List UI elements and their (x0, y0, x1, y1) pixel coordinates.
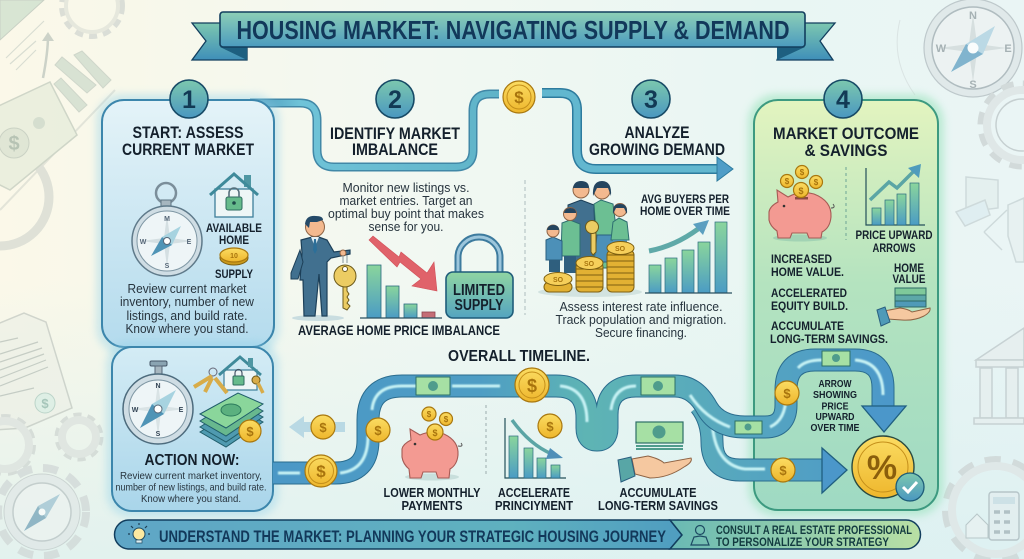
decoration: gear with calculator (946, 460, 1024, 559)
overall timeline heading: OVERALL TIMELINE. (448, 348, 590, 365)
bar chart: falling price (360, 265, 442, 318)
icon: piggy bank with coins: $ (814, 178, 819, 187)
right segment (670, 520, 920, 549)
coin: $ (527, 376, 537, 396)
label: ACCUMULATE (620, 485, 697, 500)
step 3 heading: GROWING DEMAND (589, 140, 725, 159)
connector pipe: step 1 to step 2 (250, 94, 499, 167)
timeline coins and notes (305, 351, 850, 487)
step 2 description (328, 181, 484, 234)
panel 4: market outcome and savings (748, 80, 944, 516)
banknote (641, 377, 675, 395)
left segment (115, 520, 682, 549)
ribbon body (220, 12, 805, 47)
icon: consultant (691, 526, 709, 545)
panel 4 background (754, 100, 938, 510)
arrow caption: SHOWING (813, 389, 857, 401)
decoration: compass top right: S (969, 79, 977, 91)
consult text: CONSULT A REAL ESTATE PROFESSIONAL (716, 525, 912, 537)
decoration: bank (974, 328, 1024, 424)
icon: compass (123, 361, 193, 444)
icon: family with coins: SO (553, 277, 564, 284)
lower branch arrow (700, 405, 847, 493)
coin (771, 458, 795, 482)
decoration: clock (0, 148, 49, 246)
action panel background (112, 347, 273, 511)
coin: $ (779, 463, 787, 478)
label: PRINCIYMENT (495, 498, 573, 513)
home value label: HOME (894, 263, 924, 275)
benefits list: LONG-TERM SAVINGS. (770, 332, 888, 346)
panel 1 heading: CURRENT MARKET (122, 140, 255, 159)
benefits list: INCREASED (771, 252, 832, 266)
icon: compass: E (187, 239, 192, 246)
icon: compass (132, 183, 202, 276)
step 3 description: Track population and migration. (556, 313, 726, 327)
icon: light bulb (128, 523, 150, 543)
icon: piggy bank: $ (427, 410, 432, 419)
number badge 3 (632, 80, 670, 118)
main pipe (273, 360, 883, 473)
available home label: HOME (219, 235, 249, 247)
action description: number of new listings, and build rate. (116, 482, 266, 494)
icon: percent coin with check: % (867, 449, 897, 487)
benefits list: EQUITY BUILD. (771, 299, 848, 313)
step 3 description (556, 300, 726, 340)
panel 1 description: Know where you stand. (126, 322, 248, 336)
icon: compass: M (164, 216, 170, 223)
action heading: ACTION NOW: (144, 452, 240, 469)
decoration: compass top right (897, 0, 1022, 97)
benefit: accelerate principal (495, 414, 573, 513)
small boy (546, 237, 562, 260)
step 2 description: market entries. Target an (340, 194, 473, 208)
benefits list: HOME VALUE. (771, 265, 844, 279)
connector arrow: step 2 to step 3 (542, 93, 733, 181)
icon: piggy bank with coins: $ (800, 168, 805, 177)
step 3 description: Secure financing. (595, 326, 687, 340)
banknote (416, 377, 450, 395)
divider (845, 167, 847, 240)
step 3 heading (589, 123, 725, 159)
number badge 1 (170, 80, 208, 118)
step 3: analyze growing demand (538, 80, 732, 340)
decoration: document (0, 313, 72, 430)
step 2 heading (330, 124, 461, 159)
icon: piggy bank with coins: $ (785, 177, 790, 186)
chart label (640, 194, 730, 218)
step 3 description: Assess interest rate influence. (560, 300, 722, 314)
label: LONG-TERM SAVINGS (598, 498, 718, 513)
number badge 2 (376, 80, 414, 118)
chart label: AVG BUYERS PER (641, 194, 730, 206)
coin: $ (783, 386, 791, 401)
home value label (892, 263, 926, 286)
action now panel (106, 341, 279, 517)
step 2 heading: IMBALANCE (352, 140, 438, 159)
action description: Review current market inventory, (120, 470, 262, 482)
chart label: HOME OVER TIME (640, 206, 730, 218)
decoration: money note: $ (8, 133, 20, 155)
ribbon tails (192, 23, 835, 60)
icon: limited supply padlock (446, 237, 513, 318)
panel 1 description: inventory, number of new (120, 295, 255, 309)
icon: compass: W (140, 239, 147, 246)
icon: cash stack with coin (200, 393, 263, 447)
icon: compass: N (155, 383, 161, 390)
footer banner (115, 520, 921, 549)
benefit: lower monthly payments (384, 407, 481, 513)
number badge 1: 1 (182, 86, 196, 114)
decoration: money note (0, 82, 77, 190)
benefits list (770, 252, 888, 346)
arrowhead into savings coin (862, 406, 906, 432)
icon: piggy bank with coins: $ (798, 186, 804, 196)
icon: family with coins (538, 181, 642, 297)
decoration: compass top right: W (936, 43, 947, 55)
icon: keys and house (194, 357, 263, 393)
chart caption: AVERAGE HOME PRICE IMBALANCE (298, 322, 500, 338)
arrow caption: ARROW (818, 378, 852, 390)
consult text (716, 525, 912, 549)
icon: compass: E (179, 407, 184, 414)
label (495, 485, 573, 513)
coin: top connector: $ (514, 88, 524, 107)
number badge 3: 3 (644, 86, 658, 114)
bar chart: price upward (866, 164, 925, 225)
number badge 2: 2 (388, 86, 402, 114)
home value label: VALUE (892, 274, 926, 286)
icon: compass: S (165, 263, 170, 270)
benefit: accumulate long-term savings (598, 422, 718, 513)
decoration: house sketch (956, 177, 1024, 262)
footer headline: UNDERSTAND THE MARKET: PLANNING YOUR STRATEGIC HOUSING JOURNEY (159, 527, 667, 546)
icon: person holding key (291, 216, 350, 321)
label (598, 485, 718, 513)
coin: top connector (503, 81, 535, 113)
icon: limited supply padlock: LIMITED (453, 282, 505, 299)
arrow: rising demand (649, 220, 709, 251)
divider (485, 405, 487, 477)
icon: compass: W (132, 407, 139, 414)
benefits list: ACCELERATED (771, 286, 847, 300)
arrow caption: UPWARD (816, 411, 855, 423)
arrow caption: OVER TIME (810, 422, 860, 434)
decoration: right side illustrations (897, 0, 1024, 559)
mother (592, 200, 617, 268)
price upward label (856, 230, 932, 255)
father (568, 200, 596, 270)
label: ACCELERATE (498, 485, 570, 500)
decoration: gear compass (0, 468, 86, 556)
icon: supply coin: 10 (230, 253, 238, 260)
icon: banknote stack (636, 422, 683, 450)
number badge 4: 4 (836, 86, 850, 114)
coin stacks (544, 242, 634, 292)
decoration: gear right (982, 85, 1024, 165)
girl (611, 218, 629, 240)
icon: piggy bank with coins (769, 166, 834, 242)
icon: percent coin with check (852, 436, 924, 501)
banknote (822, 351, 850, 366)
panel 4 heading (773, 124, 919, 160)
action description (116, 470, 266, 505)
coin: $ (546, 419, 554, 434)
decoration: compass top right: E (1004, 43, 1012, 55)
icon: compass: S (156, 431, 161, 438)
price upward label: PRICE UPWARD (856, 230, 932, 242)
icon: open hand (618, 456, 691, 482)
available home label: AVAILABLE (206, 223, 262, 235)
label: LOWER MONTHLY (384, 485, 481, 500)
panel 4 heading: MARKET OUTCOME (773, 124, 919, 143)
icon: cash stack with coin: $ (246, 424, 254, 439)
label (384, 485, 481, 513)
icon: limited supply padlock: SUPPLY (454, 297, 504, 314)
title: HOUSING MARKET: NAVIGATING SUPPLY & DEMAND (236, 15, 790, 45)
key (591, 233, 596, 255)
panel 1 heading (122, 123, 255, 159)
ghost arrow with coin: $ (319, 420, 327, 435)
icon: family with coins: SO (584, 261, 595, 268)
step 2 heading: IDENTIFY MARKET (330, 124, 461, 143)
banknote (735, 421, 762, 434)
panel 1 heading: START: ASSESS (132, 123, 244, 142)
panel 1 background (102, 100, 274, 347)
step 2: identify market imbalance (291, 80, 513, 338)
boy (561, 220, 580, 256)
number badge 4 (824, 80, 862, 118)
coin (775, 381, 799, 405)
icon: house with lock (210, 174, 258, 217)
icon: family with coins: SO (615, 246, 626, 253)
divider between steps 2 and 3 (524, 180, 526, 315)
price upward label: ARROWS (872, 243, 916, 255)
decoration: document: $ (41, 396, 49, 411)
panel 1: assess current market (96, 80, 280, 354)
step 2 description: sense for you. (368, 220, 444, 234)
arrow: falling red (369, 236, 437, 291)
icon: supply coin (220, 248, 248, 265)
icon: piggy bank (402, 407, 462, 480)
decoration: compass top right: N (969, 10, 977, 22)
supply label: SUPPLY (215, 269, 253, 281)
label: PAYMENTS (402, 498, 463, 513)
step 2 description: optimal buy point that makes (328, 207, 484, 221)
benefits list: ACCUMULATE (771, 319, 844, 333)
icon: piggy bank: $ (444, 415, 449, 424)
arrow caption (810, 378, 860, 434)
icon: hand with cash (877, 288, 930, 326)
step 2 description: Monitor new listings vs. (342, 181, 470, 195)
timeline pipe network (273, 360, 906, 493)
icon: piggy bank: $ (432, 428, 438, 438)
ghost arrow with coin (289, 415, 345, 439)
consult text: TO PERSONALIZE YOUR STRATEGY (716, 537, 889, 549)
panel 1 description: listings, and build rate. (126, 309, 248, 323)
coin: $ (374, 423, 382, 438)
step 3 heading: ANALYZE (624, 123, 690, 142)
decoration: left side illustrations (0, 0, 122, 556)
icon: gold key (334, 255, 356, 310)
action description: Know where you stand. (141, 493, 241, 505)
decoration: chart board (0, 0, 115, 210)
title banner (192, 12, 835, 60)
coin (515, 368, 549, 402)
bar chart: buyers per home (645, 222, 732, 293)
panel 1 description (120, 282, 255, 336)
decoration: gears (0, 0, 122, 473)
coin (366, 418, 390, 442)
coin: $ (316, 462, 326, 481)
panel 4 heading: & SAVINGS (804, 141, 888, 160)
arrow caption: PRICE (822, 400, 848, 412)
available home label (206, 223, 262, 247)
panel 1 description: Review current market (128, 282, 247, 296)
bar chart: declining (505, 418, 566, 478)
coin (305, 455, 337, 487)
